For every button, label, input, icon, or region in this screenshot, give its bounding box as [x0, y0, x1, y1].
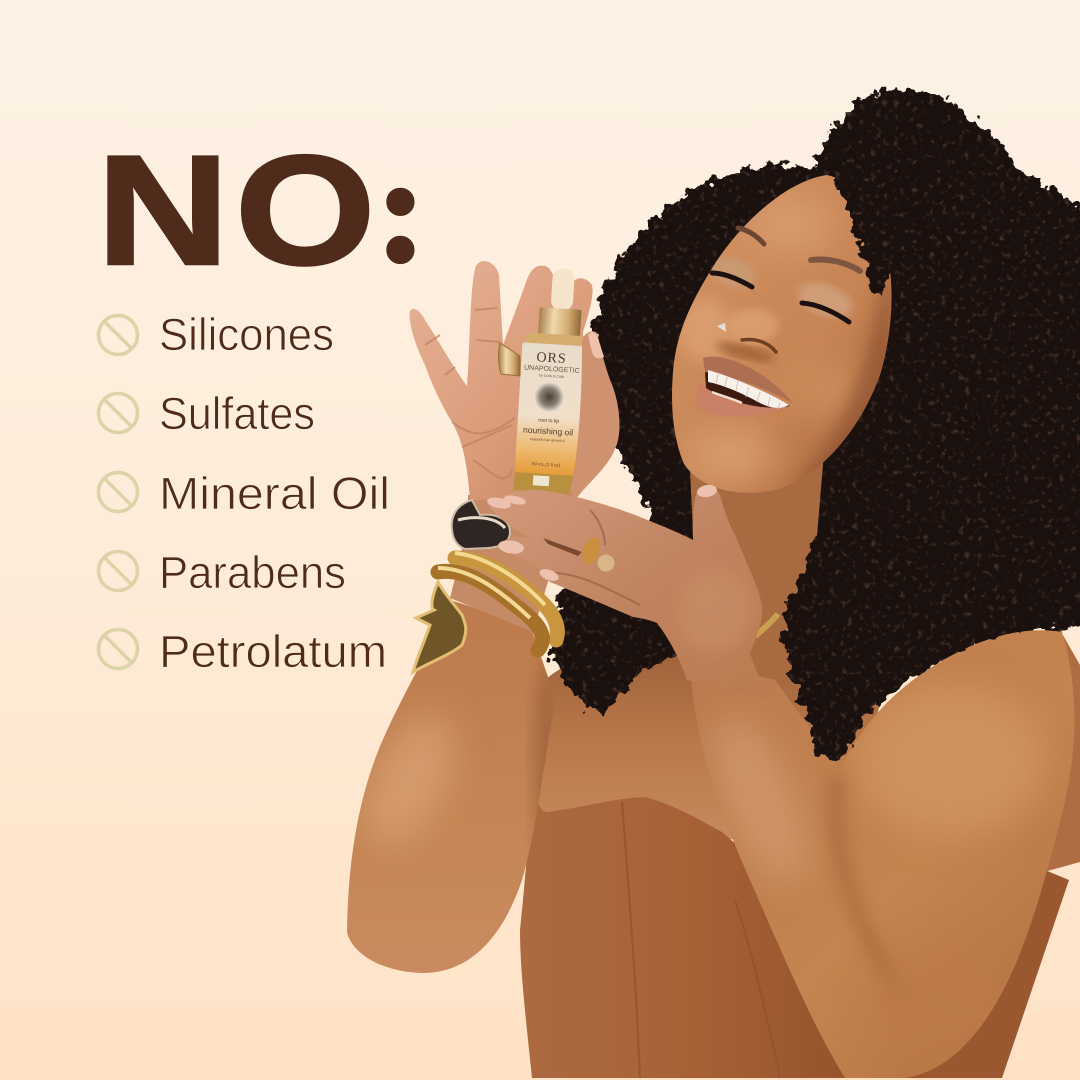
item: Sulfates: [98, 388, 315, 439]
item: Silicones: Silicones: [159, 309, 334, 360]
eyebrow right: [811, 259, 860, 271]
hair: [555, 88, 1080, 760]
dress front: [520, 782, 860, 1078]
lips: [703, 357, 793, 403]
list of excluded ingredients: [98, 309, 390, 677]
bottle body: [514, 342, 584, 478]
lower hand under chin: [487, 486, 773, 700]
neck: [690, 440, 825, 690]
upper hand holding bottle: [410, 261, 619, 500]
tagline: for Curls & Coils: [539, 373, 564, 379]
ORS logo: ORS: [536, 350, 567, 367]
bottle neck: [525, 333, 588, 348]
eye right lashes: [802, 303, 849, 322]
wrist below upper hand: [450, 495, 572, 632]
mouth and teeth: [705, 372, 790, 408]
product name: nourishing oil: [523, 425, 574, 438]
lower hand shading: [545, 510, 751, 652]
eyeshadow right: [796, 280, 854, 320]
dress: [520, 782, 1069, 1078]
gold collar: [538, 307, 582, 337]
nose ring: [717, 323, 726, 332]
volume: 59 mL (2 fl oz): [532, 461, 561, 468]
item: Mineral Oil: Mineral Oil: [159, 468, 390, 519]
heading: NO:: N: [96, 124, 229, 298]
necklace: [755, 614, 778, 636]
gap between fingers with ring behind: [543, 538, 582, 556]
chest skin: [515, 640, 880, 840]
heading: NO:: [96, 123, 426, 298]
face: [672, 160, 900, 500]
eyebrow left: [738, 228, 764, 244]
product details: supports hair growth &: [530, 437, 566, 443]
seal: [533, 381, 565, 413]
gold ring on ring finger: [499, 343, 520, 376]
nose shadow: [714, 338, 776, 366]
heading: NO:: O: [235, 123, 375, 297]
palm creases: [425, 308, 515, 479]
gold bangles: [438, 553, 557, 650]
photo: smiling woman holding the oil bottle: [340, 88, 1080, 1080]
sculptural gold cuff: [413, 582, 466, 672]
thumbnail: [588, 332, 604, 358]
item: Parabens: Parabens: [159, 547, 346, 598]
hair curls under the hand: [552, 540, 700, 710]
dress seams: [622, 802, 780, 1078]
gold rings on lower hand: [579, 535, 614, 572]
bottle: nourishing oil: [513, 266, 592, 494]
right upper arm and forearm: [680, 620, 1080, 1080]
left forearm: [347, 600, 554, 973]
dress right side: [880, 868, 1069, 1078]
curls over forehead: [830, 160, 899, 298]
eyeshadow left: [708, 255, 756, 288]
nose highlight: [726, 309, 778, 343]
bottle base: [513, 472, 576, 494]
brand line: UNAPOLOGETIC: [524, 364, 580, 375]
nostril: [742, 340, 776, 352]
dropper bulb: [550, 268, 575, 311]
fingernails: [486, 483, 718, 583]
root to tip: root to tip: [538, 417, 560, 425]
heading: NO:: :: [376, 127, 426, 293]
item: Sulfates: Sulfates: [159, 388, 315, 439]
side of back behind arm: [1044, 630, 1080, 872]
thumb overlapping bottle: [570, 331, 619, 500]
hair curls falling beside neck: [784, 420, 1080, 760]
silver cuff bracelet: [452, 500, 510, 549]
eye left lashes: [712, 273, 752, 287]
item: Petrolatum: Petrolatum: [159, 626, 387, 677]
